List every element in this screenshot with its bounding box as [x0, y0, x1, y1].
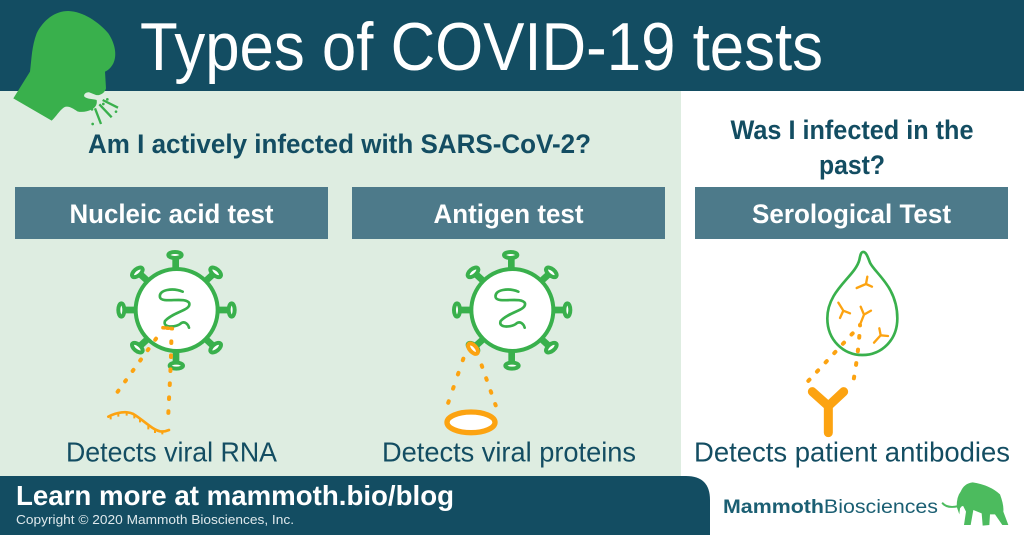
- panel: serological test header: [695, 187, 1008, 239]
- panel: antigen test header: [352, 187, 665, 239]
- icon: coughing head: [13, 11, 118, 125]
- logo: Mammoth Biosciences: [723, 482, 1008, 526]
- heading: past infection question: [730, 115, 974, 180]
- icon: blood drop with antibodies: [807, 252, 897, 433]
- logo: Mammoth Biosciences: Mammoth Biosciences: [723, 497, 938, 518]
- icon: virus with viral protein: [447, 252, 570, 433]
- icon: mammoth: [943, 482, 1008, 526]
- footer banner: [0, 476, 710, 535]
- caption: detects viral RNA: Detects viral RNA: [66, 436, 277, 468]
- title: Types of COVID-19 tests: [140, 9, 823, 85]
- copyright: Copyright © 2020 Mammoth Biosciences, Inc.: [16, 512, 294, 527]
- caption: detects patient antibodies: Detects patient antibodies: [694, 436, 1010, 468]
- heading: past infection question: Was I infected in the: [730, 115, 974, 145]
- icon: virus with viral RNA: [108, 252, 235, 434]
- caption: detects viral proteins: Detects viral proteins: [382, 436, 636, 468]
- panel: active infection background: [0, 90, 681, 476]
- heading: past infection question: past?: [819, 150, 885, 180]
- heading: active infection question: Am I actively infected with SARS-CoV-2?: [88, 129, 591, 159]
- panel: nucleic acid test header: [15, 187, 328, 239]
- footer link text: Learn more at mammoth.bio/blog: [16, 480, 454, 511]
- header band: [0, 0, 1024, 91]
- panel: nucleic acid test header: Nucleic acid test: [70, 199, 274, 229]
- panel: antigen test header: Antigen test: [434, 199, 584, 229]
- panel: serological test header: Serological Test: [752, 199, 951, 229]
